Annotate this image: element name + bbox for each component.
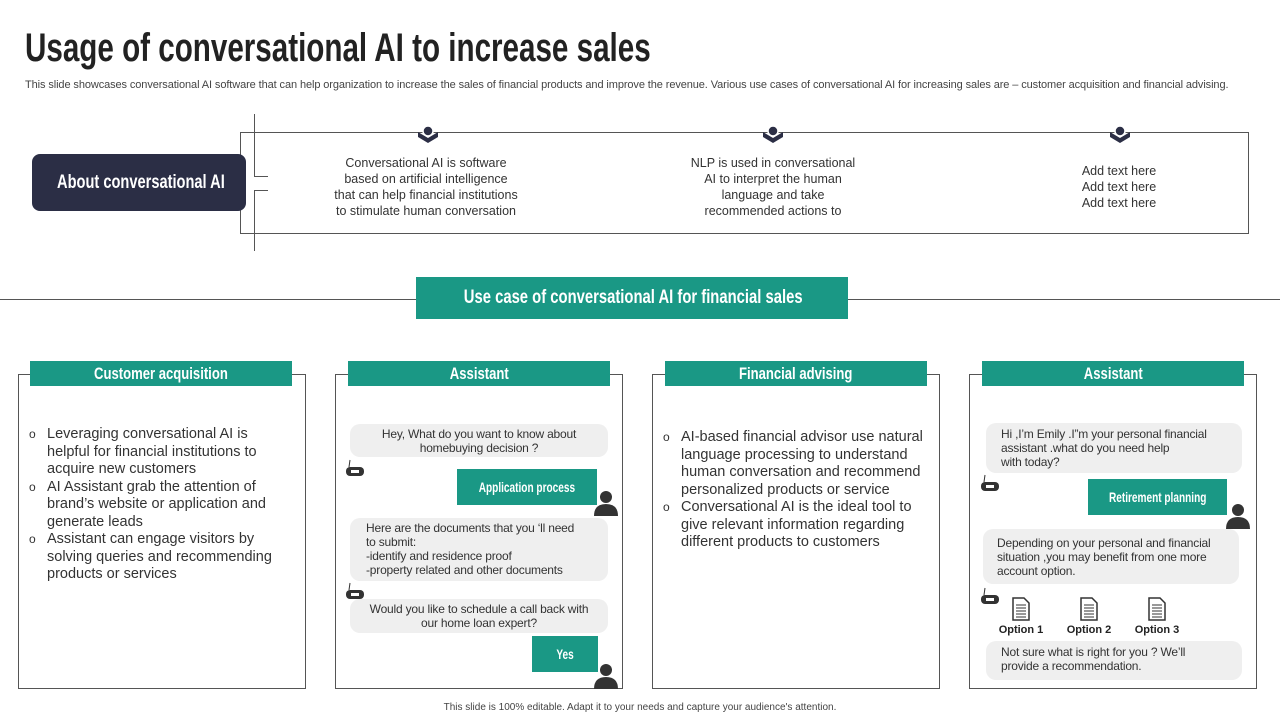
- icon: bot: [981, 474, 999, 491]
- bubble 3: provide a recommendation.: [1001, 659, 1141, 673]
- text: about 3: Add text here: [1082, 164, 1156, 178]
- bubble 1: with today?: [1001, 455, 1060, 469]
- bubble 3: [986, 641, 1242, 680]
- bubble 2: to submit:: [366, 535, 416, 549]
- section banner: [416, 277, 848, 319]
- icon: user: [1226, 504, 1250, 529]
- subtitle: This slide showcases conversational AI software that can help organization to increase the sales of financial products and improve the revenue. Various use cases of conversational AI for increasing sales are – customer acquisition and financial advising.: [25, 79, 1228, 91]
- about section frame: [240, 132, 1249, 234]
- bubble 2: [350, 518, 608, 581]
- bubble 3: Would you like to schedule a call back with: [370, 602, 588, 616]
- icon: user: [594, 491, 618, 516]
- bubble 2: Depending on your personal and financial: [997, 536, 1210, 550]
- button: yes: [532, 636, 598, 672]
- about conversational AI label: [32, 154, 246, 211]
- header: customer acquisition: Customer acquisition: [94, 364, 228, 383]
- panel: customer acquisition: Assistant can engage visitors by solving queries and recommending products or services: [47, 531, 272, 582]
- text: about 3: [1082, 164, 1156, 210]
- text: about 3: Add text here: [1082, 180, 1156, 194]
- option 2: Option 2: [1067, 624, 1111, 636]
- bubble 2: Here are the documents that you ‘ll need: [366, 521, 574, 535]
- bubble 3: [350, 599, 608, 633]
- bubble 2: -property related and other documents: [366, 563, 563, 577]
- text: about 2: [691, 156, 855, 218]
- header: customer acquisition: [30, 361, 292, 386]
- panel: assistant 2: [969, 374, 1257, 689]
- panel: assistant 1: [335, 374, 623, 689]
- text: about 2: NLP is used in conversational: [691, 156, 855, 170]
- section banner: Use case of conversational AI for financial sales: [464, 287, 803, 308]
- header: assistant 2: [982, 361, 1244, 386]
- bubble 3: our home loan expert?: [421, 616, 537, 630]
- button: application process: [457, 469, 597, 505]
- bubble 1: [350, 424, 608, 457]
- bubble 2: situation ,you may benefit from one more: [997, 550, 1206, 564]
- footer: This slide is 100% editable. Adapt it to your needs and capture your audience's attention.: [444, 702, 836, 713]
- icon: marker 2: [763, 126, 783, 143]
- text: about 2: recommended actions to: [705, 204, 841, 218]
- option 1: [999, 597, 1043, 636]
- bubble 2: account option.: [997, 564, 1075, 578]
- title: Usage of conversational AI to increase sales: [25, 26, 651, 70]
- icon: user: [594, 664, 618, 689]
- icon: marker 3: [1110, 126, 1130, 143]
- text: about 1: based on artificial intelligence: [344, 172, 508, 186]
- bubble 1: Hi ,I’m Emily .I”m your personal financial: [1001, 427, 1207, 441]
- bubble 1: assistant .what do you need help: [1001, 441, 1169, 455]
- about conversational AI label: About conversational AI: [57, 172, 225, 193]
- icon: marker 1: [418, 126, 438, 143]
- icon: bot: [346, 582, 364, 599]
- panel: financial advising: Conversational AI is the ideal tool to give relevant information regarding different products to customers: [681, 499, 912, 550]
- bubble 2: [983, 529, 1239, 584]
- header: assistant: Assistant: [450, 364, 508, 383]
- bubble 1: Hey, What do you want to know about: [382, 427, 576, 441]
- text: about 1: to stimulate human conversation: [336, 204, 516, 218]
- bubble 2: -identify and residence proof: [366, 549, 512, 563]
- button: retirement planning: Retirement planning: [1109, 489, 1206, 505]
- text: about 1: Conversational AI is software: [345, 156, 507, 170]
- bubble 1: [986, 423, 1242, 473]
- panel: customer acquisition: AI Assistant grab the attention of brand’s website or application and generate leads: [47, 478, 266, 530]
- text: about 2: language and take: [722, 188, 824, 202]
- panel: customer acquisition: Leveraging conversational AI is helpful for financial institutions to acquire new customers: [47, 426, 257, 477]
- text: about 3: Add text here: [1082, 196, 1156, 210]
- bubble 1: homebuying decision ?: [420, 441, 538, 455]
- panel: customer acquisition: [18, 374, 306, 689]
- options: [999, 597, 1179, 636]
- text: about 1: that can help financial institutions: [334, 188, 518, 202]
- header: assistant: [348, 361, 610, 386]
- option 2: [1067, 597, 1111, 636]
- header: financial advising: [665, 361, 927, 386]
- button: yes: Yes: [556, 646, 574, 662]
- option 3: Option 3: [1135, 624, 1179, 636]
- option 1: Option 1: [999, 624, 1043, 636]
- bubble 3: Not sure what is right for you ? We’ll: [1001, 645, 1185, 659]
- header: financial advising: Financial advising: [739, 364, 853, 383]
- header: assistant 2: Assistant: [1084, 364, 1142, 383]
- panel: financial advising: AI-based financial advisor use natural language processing to understand human conversation and recommend personalized products or service: [681, 429, 923, 498]
- icon: bot: [981, 588, 999, 604]
- icon: bot: [346, 460, 364, 476]
- text: about 2: AI to interpret the human: [704, 172, 842, 186]
- text: about 1: [334, 156, 518, 218]
- option 3: [1135, 597, 1179, 636]
- panel: financial advising: [652, 374, 940, 689]
- button: retirement planning: [1088, 479, 1227, 515]
- button: application process: Application process: [479, 479, 575, 495]
